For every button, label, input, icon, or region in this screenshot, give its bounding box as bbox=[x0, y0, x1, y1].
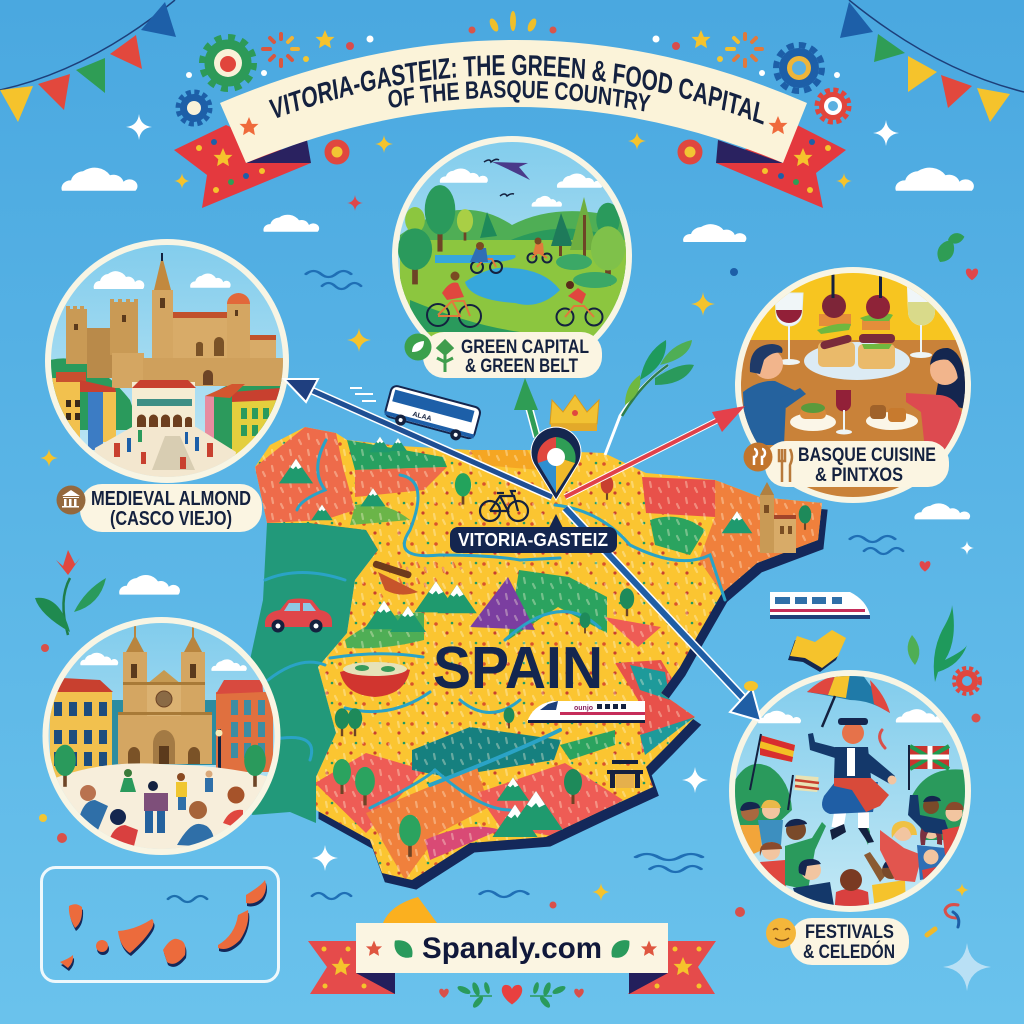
title text: VITORIA-GASTEIZ: THE GREEN & FOOD CAPITAL bbox=[268, 54, 764, 125]
label: festivals: & CELEDÓN bbox=[803, 941, 895, 963]
label: medieval almond: (CASCO VIEJO) bbox=[110, 508, 232, 530]
map label: SPAIN: SPAIN bbox=[433, 635, 603, 701]
label: basque cuisine: BASQUE CUISINE bbox=[798, 445, 936, 466]
map regions bbox=[240, 420, 840, 890]
icon: bus bbox=[383, 385, 481, 445]
train on map bbox=[527, 701, 645, 723]
label: green capital: & GREEN BELT bbox=[465, 356, 578, 377]
arrow: to basque cuisine bbox=[565, 406, 745, 497]
arrow: to green capital bbox=[514, 378, 538, 437]
Catalan cathedral on map bbox=[760, 482, 796, 553]
panel: medieval almond bbox=[45, 239, 289, 483]
map label: Vitoria-Gasteiz bbox=[450, 514, 617, 553]
decorations: gears and fireworks around title bbox=[126, 11, 899, 211]
label: festivals bbox=[766, 918, 909, 965]
monument on map bbox=[607, 760, 643, 788]
train on map: ounjo bbox=[574, 705, 593, 712]
plants on right side bbox=[908, 605, 980, 694]
trees on map bbox=[333, 473, 811, 857]
label: basque cuisine bbox=[744, 441, 949, 487]
paella and boat on map bbox=[340, 560, 418, 697]
bunting: top left bbox=[0, 0, 176, 122]
bunting: top right bbox=[840, 0, 1024, 122]
map label: Vitoria-Gasteiz: VITORIA-GASTEIZ bbox=[458, 530, 608, 550]
Canary Islands inset bbox=[42, 868, 278, 982]
title ribbon bbox=[174, 40, 846, 208]
Spain base bbox=[255, 427, 822, 880]
label: green capital bbox=[404, 332, 602, 378]
panel: festivals bbox=[725, 665, 975, 915]
title text: OF THE BASQUE COUNTRY bbox=[388, 80, 651, 112]
panel: basque cuisine bbox=[735, 265, 975, 503]
label: medieval almond bbox=[56, 484, 262, 532]
label: medieval almond: MEDIEVAL ALMOND bbox=[91, 488, 251, 510]
arrow: to medieval almond bbox=[284, 379, 552, 497]
bicycle on map bbox=[480, 491, 528, 521]
Balearic shape behind footer bbox=[383, 897, 437, 923]
mountains on map bbox=[279, 437, 752, 837]
icon: location pin bbox=[531, 427, 581, 500]
Iberia map bbox=[240, 420, 840, 890]
car bbox=[265, 598, 332, 632]
rivers bbox=[265, 440, 725, 810]
icon: crown bbox=[550, 395, 599, 431]
Portugal bbox=[250, 523, 378, 823]
footer heart and laurels bbox=[439, 981, 584, 1009]
icon: bus: ALAA bbox=[412, 411, 432, 423]
footer ribbon bbox=[308, 923, 716, 994]
arrow: to festivals bbox=[565, 508, 761, 721]
panel: plaza crowd bbox=[40, 615, 285, 860]
left crowd bbox=[738, 800, 834, 910]
plant branch bbox=[605, 340, 694, 455]
label: basque cuisine: & PINTXOS bbox=[815, 465, 903, 486]
icon: train bbox=[770, 592, 870, 619]
speed lines bbox=[350, 388, 376, 401]
confetti bbox=[880, 730, 959, 935]
clouds and sea decorations bbox=[39, 168, 991, 991]
plants on left side bbox=[35, 550, 106, 635]
right crowd bbox=[834, 795, 965, 915]
panel: green capital bbox=[392, 136, 632, 340]
label: green capital: GREEN CAPITAL bbox=[461, 337, 589, 358]
label: festivals: FESTIVALS bbox=[805, 922, 894, 943]
Balearic islands bbox=[744, 630, 846, 691]
footer text: Spanaly.com bbox=[422, 932, 602, 965]
map shadow bbox=[259, 435, 826, 888]
